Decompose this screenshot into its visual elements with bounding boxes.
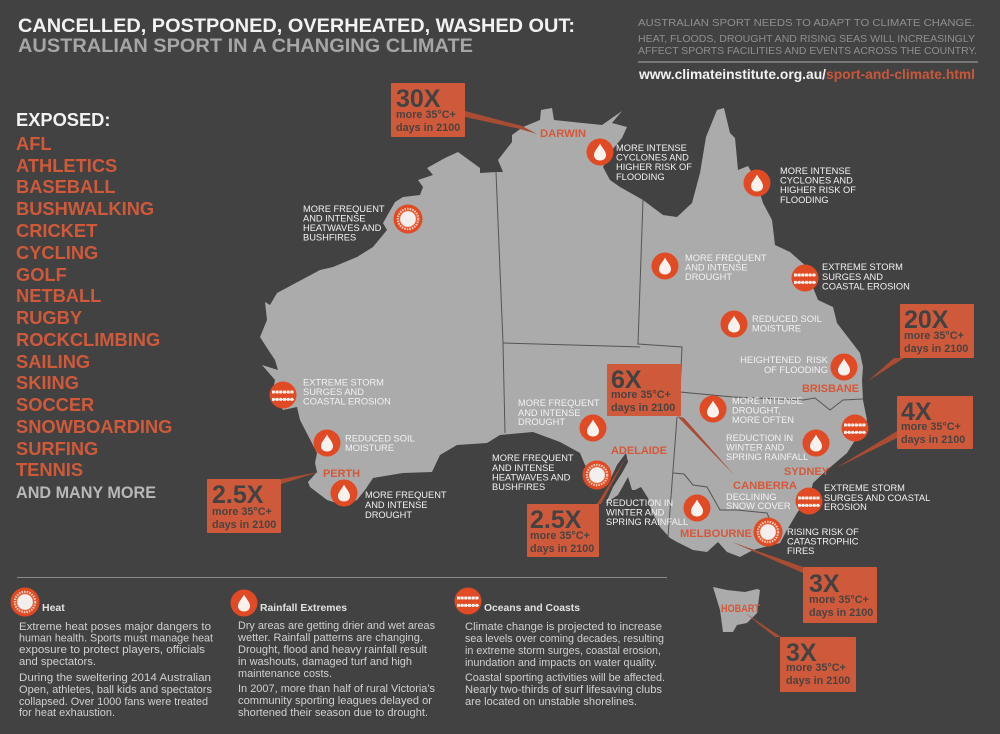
exposed sports list: CYCLING bbox=[16, 242, 98, 263]
text: heat description: and spectators. bbox=[19, 656, 96, 668]
label: drought, Queensland: DROUGHT bbox=[685, 272, 732, 282]
text: oceans description: sea levels over coming decades, resulting bbox=[465, 633, 664, 645]
intro text bbox=[638, 18, 977, 57]
text: rainfall description: Drought, flood and heavy rainfall result bbox=[238, 644, 427, 656]
text: heat description: Extreme heat poses major dangers to bbox=[19, 621, 211, 633]
label: rainfall, NSW: SPRING RAINFALL bbox=[726, 452, 808, 462]
label: rainfall, South Australia bbox=[606, 498, 688, 527]
city names: SYDNEY bbox=[784, 466, 830, 478]
text: oceans description bbox=[465, 621, 665, 708]
exposed sports list: RUGBY bbox=[16, 307, 82, 328]
intro text: HEAT, FLOODS, DROUGHT AND RISING SEAS WILL INCREASINGLY bbox=[638, 34, 975, 45]
label: heatwaves, Pilbara: AND INTENSE bbox=[303, 214, 366, 224]
exposed sports list bbox=[16, 109, 172, 502]
heading: oceans and coasts: Oceans and Coasts bbox=[484, 602, 580, 614]
icon: drop, western Queensland bbox=[652, 252, 678, 280]
title: CANCELLED, POSTPONED, OVERHEATED, WASHED OUT: bbox=[18, 15, 575, 37]
icon: waves legend bbox=[454, 588, 482, 614]
intro text: AUSTRALIAN SPORT NEEDS TO ADAPT TO CLIMATE CHANGE. bbox=[638, 18, 975, 29]
label: cyclones, north Queensland bbox=[780, 166, 856, 205]
callout: Darwin 30X: days in 2100 bbox=[396, 122, 460, 134]
label: drought, NSW bbox=[732, 396, 803, 425]
label: cyclones, north Queensland: CYCLONES AND bbox=[780, 176, 853, 186]
heading: heat: Heat bbox=[42, 602, 65, 614]
callout: Brisbane 20X bbox=[900, 304, 974, 358]
callout: Hobart 3X: days in 2100 bbox=[786, 675, 850, 687]
callout: Adelaide 6X on the map: more 35°C+ bbox=[611, 389, 671, 401]
text: rainfall description: community sporting leagues delayed or bbox=[238, 695, 432, 707]
icon: heat legend bbox=[10, 588, 40, 616]
icon: drop, Cairns bbox=[744, 170, 770, 196]
callout: Adelaide 6X on the map bbox=[607, 364, 681, 416]
text: heat description bbox=[19, 621, 213, 719]
text: heat description: Open, athletes, ball kids and spectators bbox=[19, 684, 213, 696]
text: oceans description: in extreme storm surges, coastal erosion, bbox=[465, 645, 661, 657]
text: oceans description: are located on unstable shorelines. bbox=[465, 696, 637, 708]
label: heatwaves, Pilbara: BUSHFIRES bbox=[303, 232, 356, 242]
label: snow cover bbox=[726, 492, 791, 511]
text: rainfall description: Dry areas are getting drier and wet areas bbox=[238, 620, 436, 632]
label: cyclones, Top End: FLOODING bbox=[616, 172, 665, 182]
icon: waves, Sydney coast bbox=[842, 414, 868, 442]
title: AUSTRALIAN SPORT IN A CHANGING CLIMATE bbox=[18, 35, 473, 57]
callout: Perth 2.5X: days in 2100 bbox=[212, 519, 276, 531]
label: rainfall, NSW bbox=[726, 433, 808, 462]
label: fires, Victoria: FIRES bbox=[787, 546, 814, 556]
icon: waves, Queensland coast bbox=[792, 264, 818, 292]
text: heat description: human health. Sports must manage heat bbox=[19, 632, 213, 644]
icon: heat, Pilbara bbox=[394, 204, 422, 234]
text: rainfall description: in washouts, damaged turf and high bbox=[238, 656, 412, 668]
website url bbox=[638, 67, 975, 82]
icon: drop, Darwin bbox=[586, 138, 614, 166]
city names: HOBART bbox=[721, 603, 760, 615]
icon: drop, Victoria bbox=[684, 494, 710, 522]
callout: Melbourne 3X: 3X bbox=[809, 570, 840, 598]
label: storm surges, NSW: EROSION bbox=[824, 502, 867, 512]
label: storm surges, Western Australia bbox=[303, 378, 391, 406]
exposed sports list: ROCKCLIMBING bbox=[16, 329, 160, 350]
callout: Melbourne 3X bbox=[803, 567, 877, 623]
label: flooding, Brisbane: HEIGHTENED RISK bbox=[740, 355, 829, 365]
text: heat description: collapsed. Over 1000 fans were treated bbox=[19, 696, 208, 708]
label: drought, south-west WA: AND INTENSE bbox=[365, 500, 428, 510]
label: soil moisture, Perth bbox=[345, 434, 415, 453]
callout: Brisbane 20X: days in 2100 bbox=[904, 343, 968, 355]
label: soil moisture, Perth: MOISTURE bbox=[345, 443, 394, 453]
city names: MELBOURNE bbox=[680, 528, 752, 540]
label: storm surges, Queensland: SURGES AND bbox=[822, 272, 883, 282]
label: drought, Queensland: MORE FREQUENT bbox=[685, 253, 767, 263]
label: storm surges, Western Australia: COASTAL EROSION bbox=[303, 396, 391, 406]
label: flooding, Brisbane bbox=[740, 355, 829, 375]
label: fires, Victoria: CATASTROPHIC bbox=[787, 536, 859, 546]
label: drought, South Australia: AND INTENSE bbox=[518, 408, 581, 418]
state borders bbox=[496, 172, 863, 537]
callout: Melbourne 3X: days in 2100 bbox=[809, 607, 873, 619]
callout: Sydney 4X: more 35°C+ bbox=[901, 421, 961, 433]
city names: ADELAIDE bbox=[611, 445, 667, 457]
callout: Sydney 4X: 4X bbox=[901, 398, 932, 426]
text: rainfall description: maintenance costs. bbox=[238, 668, 332, 680]
icon: drop, South Australia bbox=[580, 414, 606, 442]
exposed sports list: SNOWBOARDING bbox=[16, 416, 172, 437]
exposed sports list: SKIING bbox=[16, 372, 79, 393]
label: storm surges, Queensland bbox=[822, 262, 910, 292]
intro text: AFFECT SPORTS FACILITIES AND EVENTS ACROSS THE COUNTRY. bbox=[638, 46, 977, 57]
label: rainfall, South Australia: WINTER AND bbox=[606, 508, 665, 518]
label: cyclones, north Queensland: FLOODING bbox=[780, 195, 829, 205]
leader lines bbox=[281, 111, 904, 637]
title bbox=[18, 15, 575, 57]
label: fires, Victoria: RISING RISK OF bbox=[787, 527, 859, 537]
label: soil moisture, Queensland: REDUCED SOIL bbox=[752, 314, 822, 324]
icon: waves, Western Australia bbox=[270, 382, 296, 408]
callout: Darwin 30X bbox=[391, 83, 465, 137]
exposed sports list: NETBALL bbox=[16, 285, 101, 306]
text: rainfall description: shortened their season due to drought. bbox=[238, 707, 428, 719]
text: heat description: exposure to protect players, officials bbox=[19, 644, 206, 656]
icon: drop, south-west WA bbox=[330, 480, 358, 506]
label: drought, NSW: MORE OFTEN bbox=[732, 415, 794, 425]
website url: www.climateinstitute.org.au/ bbox=[638, 67, 826, 82]
exposed sports list: TENNIS bbox=[16, 459, 83, 480]
label: heatwaves, South Australia: AND INTENSE bbox=[492, 463, 555, 473]
icon: drop, NSW bbox=[802, 430, 830, 456]
label: heatwaves, Pilbara bbox=[303, 204, 385, 242]
icon: drop legend bbox=[230, 590, 258, 616]
callout: Hobart 3X: more 35°C+ bbox=[786, 662, 846, 674]
city names bbox=[323, 128, 859, 615]
website url: sport-and-climate.html bbox=[826, 67, 975, 82]
text: oceans description: Coastal sporting activities will be affected. bbox=[465, 672, 665, 684]
label: soil moisture, Queensland bbox=[752, 314, 822, 334]
callout: Adelaide 2.5X: more 35°C+ bbox=[530, 530, 590, 542]
label: heatwaves, South Australia: MORE FREQUENT bbox=[492, 453, 574, 463]
callout: Adelaide 2.5X: days in 2100 bbox=[530, 543, 594, 555]
divider bbox=[17, 577, 667, 578]
label: heatwaves, South Australia bbox=[492, 453, 574, 492]
heading: rainfall extremes: Rainfall Extremes bbox=[260, 602, 347, 614]
label: rainfall, NSW: REDUCTION IN bbox=[726, 433, 793, 443]
label: storm surges, Queensland: COASTAL EROSION bbox=[822, 282, 910, 292]
label: cyclones, Top End: CYCLONES AND bbox=[616, 152, 689, 162]
label: storm surges, Western Australia: SURGES AND bbox=[303, 387, 364, 397]
city names: CANBERRA bbox=[733, 480, 797, 492]
label: heatwaves, Pilbara: HEATWAVES AND bbox=[303, 223, 382, 233]
callout: Darwin 30X: more 35°C+ bbox=[396, 109, 456, 121]
text: rainfall description bbox=[237, 620, 436, 719]
callout: Brisbane 20X: 20X bbox=[904, 306, 949, 334]
exposed sports list: EXPOSED: bbox=[16, 109, 110, 130]
label: rainfall, South Australia: SPRING RAINFALL bbox=[606, 517, 688, 527]
exposed sports list: GOLF bbox=[16, 264, 67, 285]
city names: DARWIN bbox=[540, 128, 586, 140]
city names: BRISBANE bbox=[802, 383, 859, 395]
callout: Brisbane 20X: more 35°C+ bbox=[904, 330, 964, 342]
label: cyclones, Top End bbox=[616, 143, 692, 182]
label: snow cover: DECLINING bbox=[726, 492, 777, 502]
text: rainfall description: In 2007, more than half of rural Victoria's bbox=[238, 683, 436, 695]
icon: heat, Eyre Peninsula bbox=[582, 460, 612, 490]
icon: heat, Melbourne bbox=[754, 518, 782, 546]
exposed sports list: ATHLETICS bbox=[16, 155, 117, 176]
label: drought, NSW: DROUGHT, bbox=[732, 406, 781, 416]
label: heatwaves, Pilbara: MORE FREQUENT bbox=[303, 204, 385, 214]
callout: Sydney 4X bbox=[897, 396, 973, 449]
label: drought, south-west WA: DROUGHT bbox=[365, 510, 412, 520]
icon: drop, Perth north bbox=[314, 430, 340, 456]
label: cyclones, Top End: MORE INTENSE bbox=[616, 143, 687, 153]
text: heat description: for heat exhaustion. bbox=[19, 707, 115, 719]
label: drought, south-west WA: MORE FREQUENT bbox=[365, 490, 447, 500]
callout: Hobart 3X bbox=[780, 637, 856, 692]
exposed sports list: AND MANY MORE bbox=[16, 484, 156, 502]
exposed sports list: CRICKET bbox=[16, 220, 97, 241]
text: heat description: During the sweltering 2014 Australian bbox=[19, 672, 211, 684]
label: drought, South Australia: MORE FREQUENT bbox=[518, 398, 600, 408]
callout: Darwin 30X: 30X bbox=[396, 85, 441, 113]
panel: heat bbox=[10, 588, 213, 719]
callout: Perth 2.5X bbox=[207, 479, 281, 533]
text: oceans description: Nearly two-thirds of surf lifesaving clubs bbox=[465, 684, 663, 696]
label: rainfall, South Australia: REDUCTION IN bbox=[606, 498, 673, 508]
exposed sports list: SOCCER bbox=[16, 394, 94, 415]
icon: drop, inland NSW bbox=[700, 396, 726, 422]
label: storm surges, NSW: SURGES AND COASTAL bbox=[824, 493, 930, 503]
label: storm surges, Queensland: EXTREME STORM bbox=[822, 262, 903, 272]
callout: Hobart 3X: 3X bbox=[786, 639, 817, 667]
callout: Adelaide 6X on the map: days in 2100 bbox=[611, 402, 675, 414]
label: storm surges, NSW: EXTREME STORM bbox=[824, 483, 905, 493]
callout: Adelaide 2.5X: 2.5X bbox=[530, 506, 582, 534]
callout: Melbourne 3X: more 35°C+ bbox=[809, 594, 869, 606]
panel: rainfall extremes bbox=[230, 590, 436, 719]
label: flooding, Brisbane: OF FLOODING bbox=[764, 365, 828, 375]
callout: Sydney 4X: days in 2100 bbox=[901, 434, 965, 446]
label: storm surges, Western Australia: EXTREME STORM bbox=[303, 378, 384, 388]
text: oceans description: Climate change is projected to increase bbox=[465, 621, 662, 633]
exposed sports list: SAILING bbox=[16, 351, 90, 372]
exposed sports list: SURFING bbox=[16, 438, 98, 459]
label: drought, NSW: MORE INTENSE bbox=[732, 396, 803, 406]
exposed sports list: AFL bbox=[16, 133, 52, 154]
callout: Perth 2.5X: more 35°C+ bbox=[212, 506, 272, 518]
label: snow cover: SNOW COVER bbox=[726, 501, 791, 511]
label: rainfall, NSW: WINTER AND bbox=[726, 442, 785, 452]
map of Australia bbox=[260, 108, 867, 632]
label: soil moisture, Perth: REDUCED SOIL bbox=[345, 434, 415, 444]
label: drought, Queensland: AND INTENSE bbox=[685, 262, 748, 272]
label: heatwaves, South Australia: BUSHFIRES bbox=[492, 482, 545, 492]
callout: Perth 2.5X: 2.5X bbox=[212, 481, 264, 509]
icon: waves, south NSW coast bbox=[796, 488, 822, 514]
exposed sports list: BASEBALL bbox=[16, 176, 116, 197]
label: drought, South Australia bbox=[518, 398, 600, 427]
label: storm surges, NSW bbox=[824, 483, 930, 512]
callout: Adelaide 2.5X bbox=[527, 504, 599, 557]
label: drought, south-west WA bbox=[365, 490, 447, 520]
label: heatwaves, South Australia: HEATWAVES AND bbox=[492, 472, 571, 482]
label: drought, Queensland bbox=[685, 253, 767, 282]
text: oceans description: inundation and impacts on water quality. bbox=[465, 657, 657, 669]
text: rainfall description: wetter. Rainfall patterns are changing. bbox=[237, 632, 423, 644]
city names: PERTH bbox=[323, 468, 360, 480]
exposed sports list: BUSHWALKING bbox=[16, 198, 154, 219]
label: drought, South Australia: DROUGHT bbox=[518, 417, 565, 427]
label: soil moisture, Queensland: MOISTURE bbox=[752, 324, 801, 334]
icon: drop, central Queensland bbox=[720, 310, 748, 338]
callout: Adelaide 6X on the map: 6X bbox=[611, 366, 642, 394]
label: cyclones, north Queensland: HIGHER RISK OF bbox=[780, 185, 856, 195]
icon: drop, Brisbane bbox=[830, 354, 858, 380]
panel: oceans and coasts bbox=[454, 588, 665, 708]
tasmania bbox=[713, 587, 760, 632]
label: fires, Victoria bbox=[787, 527, 859, 556]
label: cyclones, north Queensland: MORE INTENSE bbox=[780, 166, 851, 176]
label: cyclones, Top End: HIGHER RISK OF bbox=[616, 162, 692, 172]
